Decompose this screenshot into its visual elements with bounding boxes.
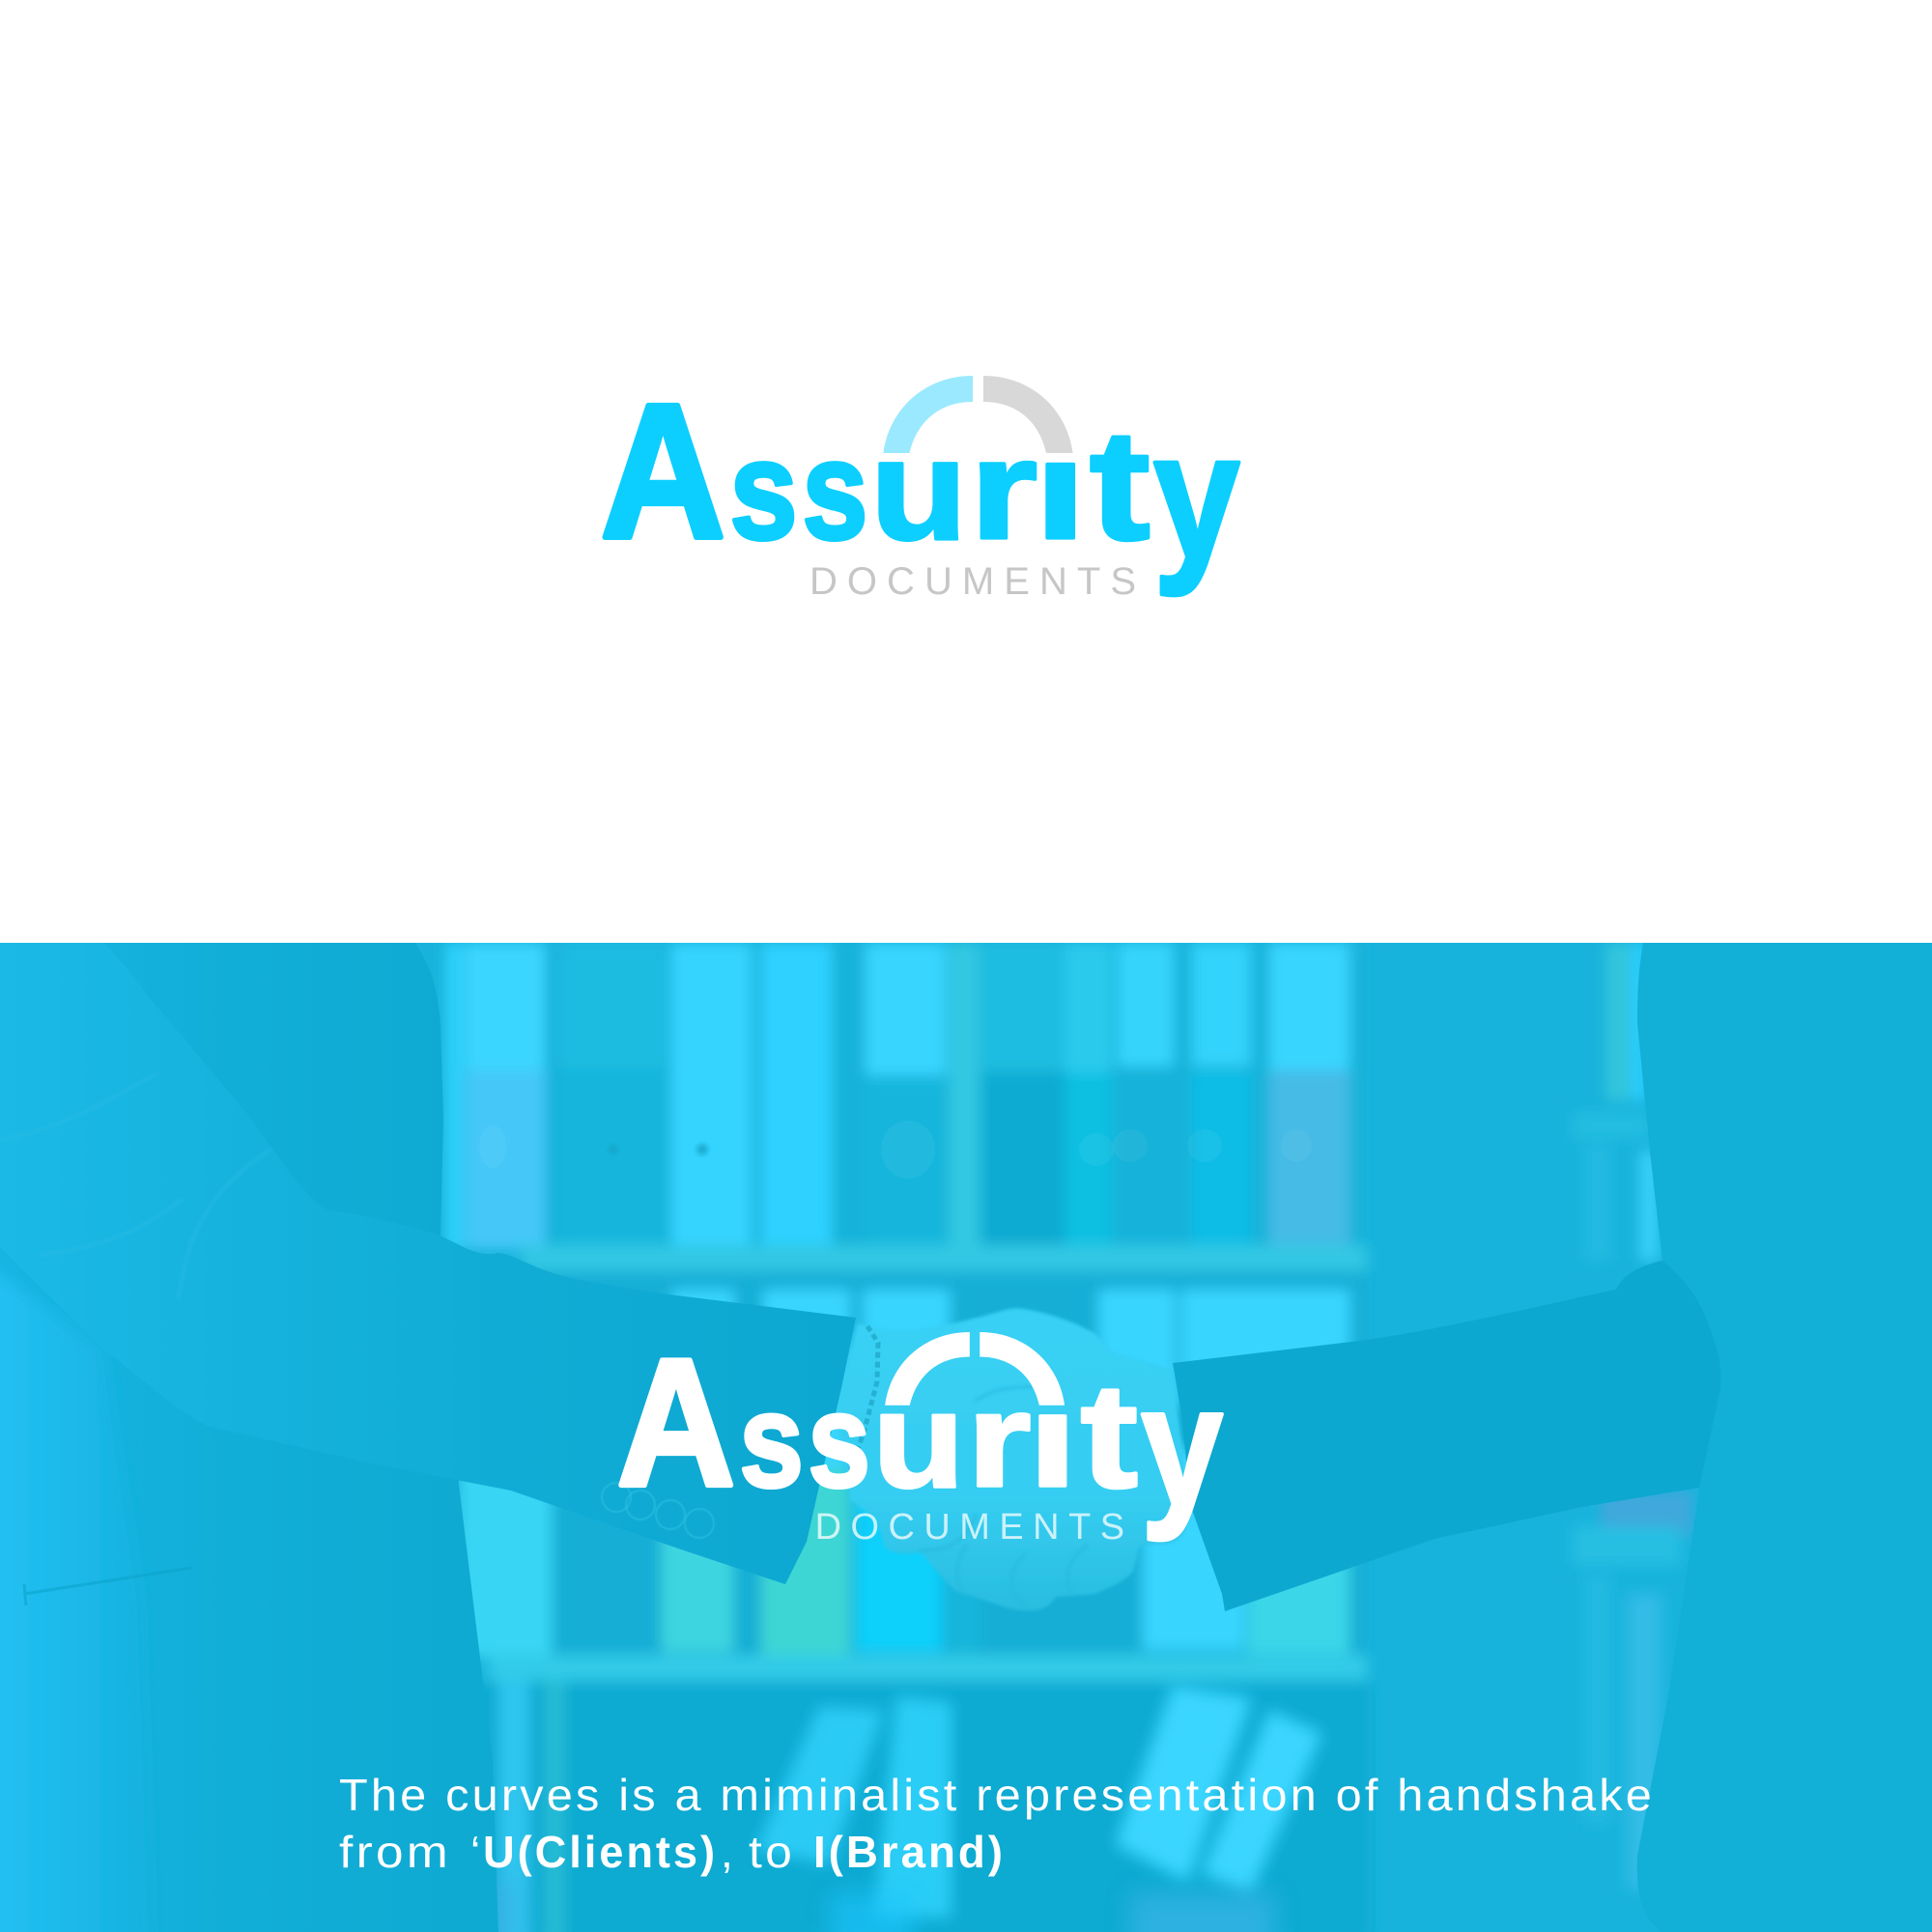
left person: jacket body — [350, 943, 498, 1932]
caption line 2: to — [749, 1827, 795, 1877]
binder dark dots — [609, 1144, 708, 1155]
logo: Assurity Documents in white — [617, 1321, 1223, 1548]
wordmark: Assurity: y — [1153, 394, 1240, 596]
caption line 2 — [339, 1827, 1006, 1877]
wordmark: Assurity: s — [730, 412, 798, 568]
right person: jacket body — [1636, 943, 1704, 1898]
caption line 2: from — [339, 1827, 451, 1877]
wordmark: Assurity: r — [967, 1365, 1031, 1515]
panel: handshake photo with blue overlay — [0, 943, 1932, 1932]
caption text — [339, 1770, 1655, 1877]
logo: Assurity Documents in colour — [601, 364, 1240, 603]
wordmark: Assurity: i — [1035, 412, 1087, 568]
left person: bracelet — [848, 1325, 881, 1469]
background: right wall shelves — [1573, 943, 1692, 1889]
wordmark: Assurity: s — [809, 1366, 870, 1515]
binder ring holes — [479, 1121, 1312, 1179]
wordmark: Assurity: r — [970, 411, 1037, 568]
wordmark: Assurity: t — [1081, 1353, 1138, 1519]
caption line 2: ‘ — [470, 1827, 480, 1877]
wordmark: Assurity: u — [872, 1365, 964, 1517]
bookshelf: blurred binders and shelves — [440, 943, 1372, 1932]
wordmark: Assurity — [618, 1357, 1224, 1542]
wordmark: Assurity: A — [617, 1321, 735, 1523]
icon: right curve of handshake — [983, 376, 1073, 453]
tagline: DOCUMENTS: DOCUMENTS — [815, 1507, 1124, 1548]
wordmark: Assurity: y — [1141, 1350, 1223, 1542]
left person: pocket — [24, 1568, 191, 1605]
right person: sleeve — [1173, 1261, 1721, 1611]
bookshelf: soft colour patches — [456, 1879, 1275, 1932]
bookshelf: fallen binders — [755, 1689, 1319, 1918]
tagline: DOCUMENTS: DOCUMENTS — [810, 560, 1136, 603]
panel base colour — [415, 943, 1702, 1932]
wordmark: Assurity: u — [870, 411, 967, 570]
left person: jacket front panel — [0, 1276, 99, 1932]
wordmark: Assurity: i — [1029, 1367, 1077, 1515]
top panel: white background — [0, 0, 1932, 943]
caption line 2: U(Clients) — [483, 1827, 718, 1877]
caption line 1: The curves is a miminalist representation of handshake — [339, 1770, 1655, 1820]
icon: handshake curves — [885, 1332, 1065, 1406]
icon: left curve of handshake — [883, 376, 973, 453]
caption line 2: I(Brand) — [813, 1827, 1006, 1877]
left person: sleeve buttons — [602, 1483, 714, 1538]
left person: sleeve — [73, 1236, 856, 1584]
wordmark: Assurity: t — [1090, 398, 1151, 573]
wordmark: Assurity: A — [601, 364, 725, 578]
wordmark: Assurity: s — [802, 413, 867, 569]
wordmark: Assurity: s — [739, 1367, 804, 1516]
wordmark: Assurity — [603, 402, 1240, 597]
handshake hands — [835, 1308, 1190, 1610]
hand fingers shading — [976, 1385, 1033, 1401]
caption line 2: , — [721, 1827, 733, 1877]
left person: sleeve folds — [0, 1072, 270, 1299]
